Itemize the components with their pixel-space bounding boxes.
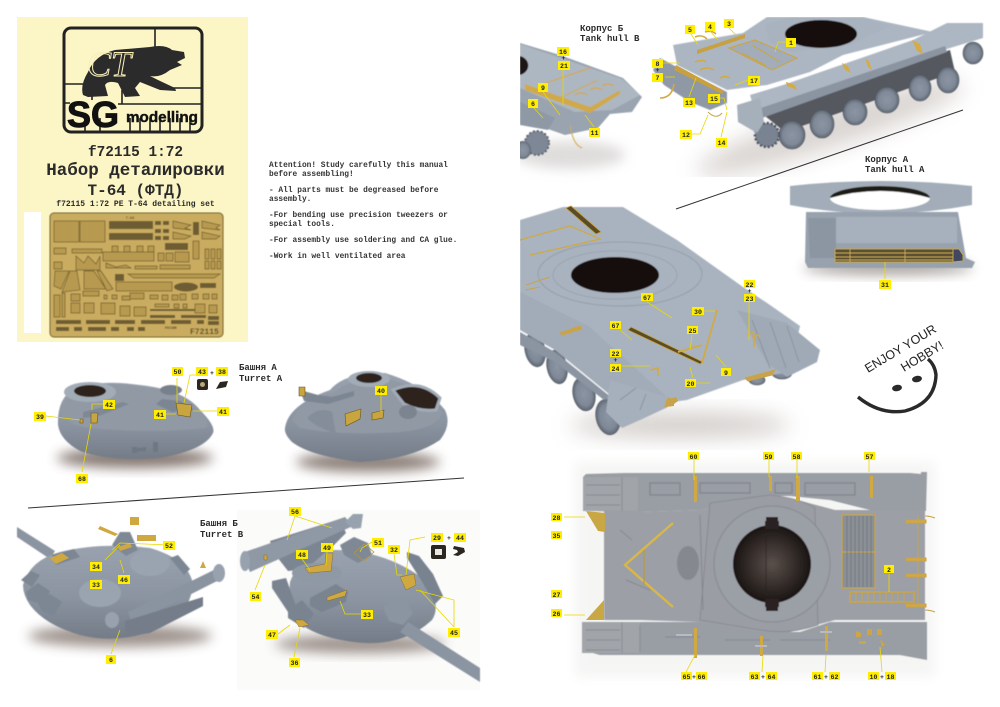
attention text: special tools. <box>269 220 335 229</box>
label texts: 47 <box>268 632 276 639</box>
gold parts <box>264 553 416 627</box>
road wheels <box>522 331 792 437</box>
gold parts <box>80 403 192 423</box>
label texts: 14 <box>718 140 725 147</box>
label texts: 41 <box>219 409 227 416</box>
gold straps <box>694 476 873 658</box>
rear face <box>653 58 727 110</box>
label texts: + <box>748 288 752 295</box>
label texts: 8 <box>656 61 660 68</box>
label texts: 3 <box>727 21 731 28</box>
label texts: 46 <box>120 577 128 584</box>
label texts: 51 <box>374 540 382 547</box>
gold parts <box>50 517 206 568</box>
small part icons: 29 + 44 <box>431 545 465 559</box>
suspension shadow <box>760 50 955 132</box>
turret A right photo <box>285 371 448 472</box>
label texts: 11 <box>591 130 598 137</box>
heading: turret B <box>200 519 244 540</box>
label texts: 18 <box>887 674 894 681</box>
logo: SG modelling sprue <box>64 28 202 135</box>
label texts: 5 <box>688 27 692 34</box>
label texts: 1 <box>789 40 793 47</box>
label texts: 38 <box>218 369 226 376</box>
label texts: 21 <box>560 63 568 70</box>
title <box>46 145 225 209</box>
hull headings: Корпус Б <box>580 24 624 34</box>
central deck <box>604 498 925 632</box>
logo SG: SG <box>67 94 119 135</box>
gold corners <box>586 511 605 620</box>
label texts: + <box>210 370 214 377</box>
turret hole <box>733 517 811 611</box>
label texts: 58 <box>793 454 800 461</box>
label texts: 24 <box>612 366 619 373</box>
label texts: 28 <box>553 515 560 522</box>
heading: hull A: Корпус А <box>865 155 909 165</box>
label texts: 20 <box>687 381 694 388</box>
engine grille <box>729 40 797 70</box>
photo-etched fret: T-64 <box>126 217 134 221</box>
engine grille <box>842 515 875 588</box>
label texts: + <box>761 674 765 681</box>
engine grille <box>520 226 600 255</box>
heading: hull A: Tank hull A <box>865 165 925 175</box>
grille 31 <box>835 249 963 262</box>
gold parts <box>566 206 703 364</box>
label texts: 16 <box>559 49 567 56</box>
label texts: 66 <box>698 674 705 681</box>
label texts: 2 <box>887 567 891 574</box>
turret hole <box>785 20 857 48</box>
attention text: -For bending use precision tweezers or <box>269 211 448 220</box>
panel: cover <box>17 17 248 342</box>
fender <box>750 23 983 112</box>
turret A left photo <box>57 382 213 468</box>
gold parts <box>299 387 384 426</box>
label texts: 48 <box>298 552 306 559</box>
label texts: 67 <box>612 323 619 330</box>
label texts: 30 <box>694 309 702 316</box>
label texts: 65 <box>683 674 690 681</box>
label texts: 50 <box>174 369 181 376</box>
label texts: + <box>824 674 828 681</box>
lower fender <box>582 622 927 660</box>
top plate <box>673 17 933 90</box>
smiley: HOBBY! <box>898 338 946 375</box>
road wheels <box>779 42 983 149</box>
label texts: 41 <box>156 412 164 419</box>
label texts: 39 <box>36 414 44 421</box>
title: f72115 1:72 <box>88 145 183 161</box>
label texts: 12 <box>682 132 690 139</box>
turret B left photo <box>17 517 225 647</box>
plate <box>520 207 800 405</box>
label texts: 61 <box>814 674 821 681</box>
smiley: ENJOY YOUR <box>862 322 939 376</box>
label texts: 67 <box>643 295 651 302</box>
label texts: 64 <box>768 674 775 681</box>
label texts: 33 <box>92 582 100 589</box>
label texts: 25 <box>689 328 696 335</box>
label texts: 54 <box>252 594 259 601</box>
divider line <box>28 478 464 508</box>
label texts: 6 <box>531 101 535 108</box>
icon: bear silhouette <box>82 46 185 97</box>
heading: turret B: Turret B <box>200 530 244 540</box>
label texts: 42 <box>105 402 113 409</box>
label texts: 17 <box>750 78 758 85</box>
label texts: 35 <box>553 533 560 540</box>
label texts: 49 <box>323 545 331 552</box>
label texts: + <box>692 674 696 681</box>
small part icons: 43 + 38 <box>197 379 228 390</box>
turret B right photo <box>237 510 480 690</box>
label texts: 40 <box>377 388 385 395</box>
upper fender <box>583 472 927 512</box>
title: Т-64 (ФТД) <box>87 182 184 200</box>
label texts: 59 <box>765 454 772 461</box>
hull headings: Tank hull B <box>580 34 640 44</box>
hull B left crop <box>515 43 642 169</box>
fret marking: F72115 <box>190 328 219 337</box>
label texts: 34 <box>92 564 100 571</box>
label texts: 23 <box>746 296 753 303</box>
label texts: 6 <box>109 657 113 664</box>
logo modelling: modelling <box>126 110 198 126</box>
commander hatch <box>677 546 699 580</box>
white strip <box>24 212 41 333</box>
label texts: + <box>447 535 451 542</box>
hull middle photo <box>520 206 820 438</box>
label texts: 22 <box>746 282 753 289</box>
turret ring <box>538 242 702 306</box>
label texts: 13 <box>685 100 693 107</box>
label texts: 57 <box>866 454 873 461</box>
label texts: 32 <box>390 547 398 554</box>
label texts: 45 <box>450 630 458 637</box>
label texts: 22 <box>612 351 619 358</box>
heading: turret A: Башня А <box>239 363 277 373</box>
front right box <box>737 310 820 377</box>
front left box <box>606 394 640 428</box>
heading: turret A: Turret A <box>239 374 283 384</box>
label texts: 56 <box>291 509 299 516</box>
photo-etched fret <box>50 213 223 337</box>
hull B main photo <box>653 17 983 190</box>
left fender <box>520 292 668 420</box>
attention text: - All parts must be degreased before <box>269 186 439 195</box>
gold part 2 <box>850 592 914 602</box>
label texts: 10 <box>870 674 877 681</box>
label texts: 29 <box>433 535 441 542</box>
label texts: 63 <box>751 674 758 681</box>
hull headings <box>580 24 925 175</box>
label texts: + <box>656 67 660 74</box>
label texts: 7 <box>656 75 660 82</box>
label texts: 4 <box>708 24 712 31</box>
leader lines <box>46 28 889 672</box>
turret hole <box>571 257 659 293</box>
label texts: 9 <box>541 85 545 92</box>
photo-etched fret: РОССИЯ <box>165 326 177 330</box>
label texts: 60 <box>690 454 697 461</box>
turret ring <box>714 506 830 622</box>
label texts: + <box>614 357 618 364</box>
label texts: 9 <box>724 370 728 377</box>
divider line <box>676 110 963 209</box>
attention text: -Work in well ventilated area <box>269 252 406 261</box>
label texts: 33 <box>363 612 371 619</box>
heading: turret B: Башня Б <box>200 519 238 529</box>
label texts: 31 <box>881 282 889 289</box>
gold strips <box>674 34 745 94</box>
logo monogram: CT <box>87 44 134 84</box>
label texts: 27 <box>553 592 560 599</box>
label texts: 52 <box>165 543 173 550</box>
smiley <box>858 322 946 412</box>
label texts: 68 <box>78 476 86 483</box>
title: Набор деталировки <box>46 160 225 181</box>
label texts: + <box>562 55 566 62</box>
attention text: -For assembly use soldering and CA glue. <box>269 236 457 245</box>
heading: hull A <box>865 155 925 175</box>
gold V part <box>625 523 673 607</box>
label texts: + <box>880 674 884 681</box>
hull A photo <box>790 181 975 275</box>
attention text: assembly. <box>269 195 311 204</box>
label texts: 36 <box>291 660 298 667</box>
title: f72115 1:72 PE T-64 detailing set <box>56 200 215 209</box>
label texts: 43 <box>198 369 206 376</box>
label texts: 62 <box>831 674 838 681</box>
attention text <box>269 161 457 261</box>
attention text: before assembling! <box>269 170 354 179</box>
stowage bins <box>650 483 855 495</box>
attention text: Attention! Study carefully this manual <box>269 161 448 170</box>
label texts: 26 <box>553 611 560 618</box>
heading: turret A <box>239 363 283 384</box>
label texts: 15 <box>710 96 718 103</box>
label texts: 44 <box>456 535 464 542</box>
hull top-view photo <box>575 462 935 677</box>
